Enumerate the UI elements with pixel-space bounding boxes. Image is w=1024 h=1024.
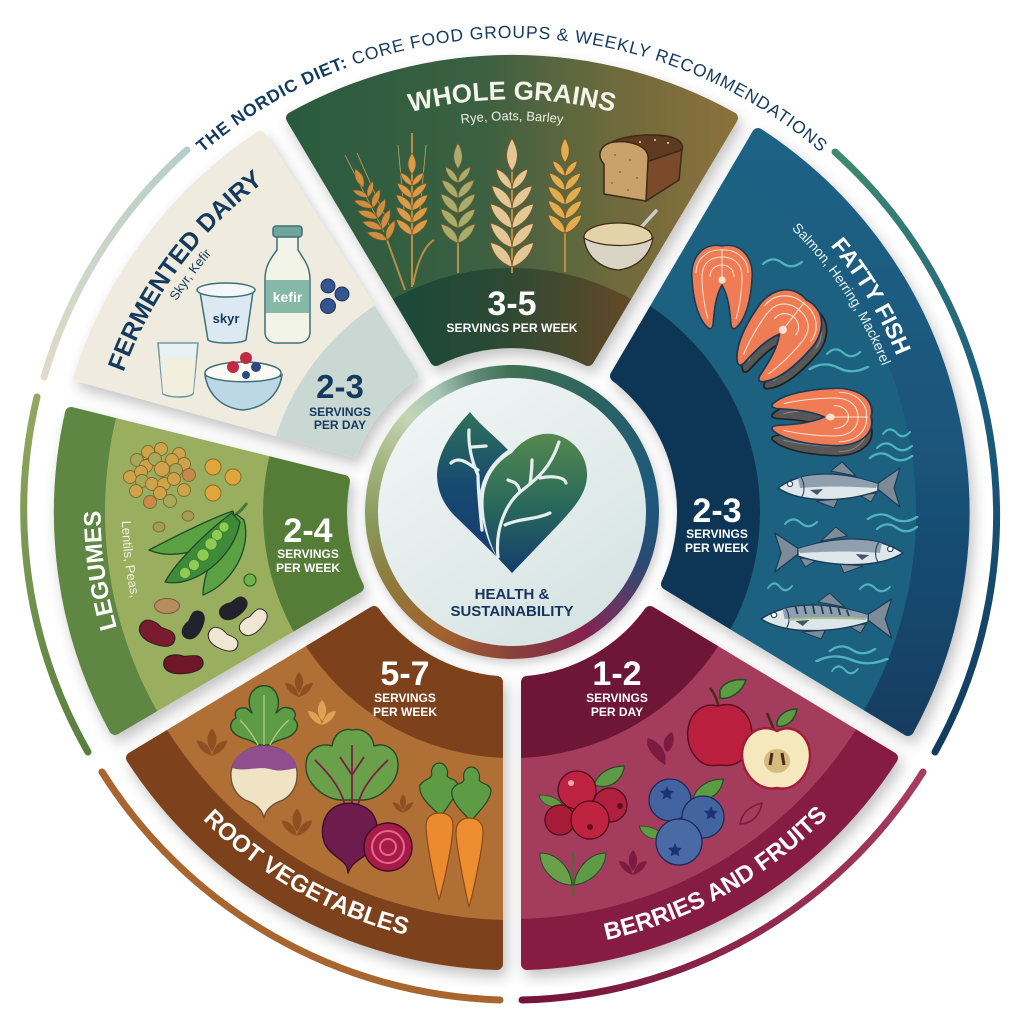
servings: root vegetables xyxy=(373,655,437,719)
outer arc: berries xyxy=(522,772,923,1000)
servings: dairy: PER DAY xyxy=(314,418,366,432)
servings: berries: 1-2 xyxy=(592,655,642,693)
servings: dairy: 2-3 xyxy=(316,368,364,405)
servings: berries: PER DAY xyxy=(591,705,643,719)
servings: legumes: 2-4 xyxy=(283,512,333,550)
icon: skyr cup xyxy=(197,283,255,343)
icon: turnip xyxy=(231,686,297,818)
icon: whole fish xyxy=(761,462,903,639)
icon: beans xyxy=(136,592,271,676)
whole grains background xyxy=(285,54,747,378)
outer arc: legumes xyxy=(24,397,88,752)
outer arc: fermented dairy xyxy=(44,150,187,377)
hub ring xyxy=(365,365,659,659)
panel: fermented dairy xyxy=(72,131,427,470)
panel: fatty fish xyxy=(609,128,981,748)
icon: kefir bottle xyxy=(265,226,310,343)
servings: fatty fish: SERVINGS xyxy=(686,527,748,541)
icon: waves xyxy=(763,259,917,673)
servings: dairy xyxy=(309,368,371,432)
icon: grain stalks xyxy=(342,133,582,290)
panel: legumes xyxy=(50,407,373,747)
icon: blueberries xyxy=(320,279,349,314)
hub label: SUSTAINABILITY xyxy=(450,603,574,620)
outer arc: fatty fish xyxy=(835,152,997,752)
icon: lentils xyxy=(124,442,241,532)
servings: fatty fish: PER WEEK xyxy=(685,541,749,555)
panel: berries and fruits xyxy=(518,606,907,984)
icon: leaf sprig xyxy=(540,852,606,897)
servings: whole grains: 3-5 xyxy=(487,285,537,323)
icon: decorative leaves xyxy=(619,732,762,875)
heading: whole grains: WHOLE GRAINS xyxy=(406,82,616,111)
servings: whole grains xyxy=(446,285,578,335)
icon: kefir bottle: kefir xyxy=(273,289,303,305)
dairy background xyxy=(72,131,427,470)
icon: pea pods xyxy=(149,503,256,595)
berries background xyxy=(518,606,907,984)
heading: fatty fish: FATTY FISH xyxy=(831,236,911,355)
servings: root vegetables: 5-7 xyxy=(380,655,430,693)
icon: yogurt bowl xyxy=(205,352,282,410)
servings: berries: SERVINGS xyxy=(586,691,648,705)
icon: carrots xyxy=(420,763,491,907)
servings: root vegetables: PER WEEK xyxy=(373,705,437,719)
icon: apples xyxy=(688,680,810,789)
hub disc xyxy=(378,378,646,646)
subheading: grains: Rye, Oats, Barley xyxy=(461,112,564,126)
heading: legumes: LEGUMES xyxy=(84,512,117,631)
central hub xyxy=(378,378,646,646)
icon: porridge bowl xyxy=(584,211,656,270)
legumes background xyxy=(50,407,373,747)
servings: fatty fish: 2-3 xyxy=(692,492,742,530)
servings: fatty fish xyxy=(685,492,749,555)
hub label: HEALTH & xyxy=(475,586,550,603)
icon: blueberries xyxy=(639,779,724,865)
servings: whole grains: SERVINGS PER WEEK xyxy=(446,321,578,335)
servings: root vegetables: SERVINGS xyxy=(374,691,436,705)
icon: bread loaf xyxy=(600,135,683,201)
icon: salmon steaks xyxy=(692,245,872,456)
icon: skyr cup: skyr xyxy=(213,311,239,326)
servings: dairy: SERVINGS xyxy=(309,405,371,419)
title: THE NORDIC DIET: CORE FOOD GROUPS & WEEKLY RECOMMENDATIONS xyxy=(195,26,826,150)
subheading: dairy: Skyr, Kefir xyxy=(170,249,210,300)
panel: root vegetables xyxy=(125,606,514,984)
outer arc: root vegetables xyxy=(102,772,500,1000)
heading: root vegetables: ROOT VEGETABLES xyxy=(204,808,408,934)
panel: whole grains xyxy=(285,54,747,378)
icon: beetroot xyxy=(306,730,412,873)
hub label xyxy=(450,586,574,620)
heading: berries and fruits: BERRIES AND FRUITS xyxy=(604,806,826,940)
servings: legumes: SERVINGS xyxy=(277,547,339,561)
root vegetables background xyxy=(125,606,514,984)
subheading: fish: Salmon, Herring, Mackerel xyxy=(793,224,892,366)
icon: leaf heart xyxy=(437,412,587,573)
servings: legumes xyxy=(276,512,340,575)
subheading: legumes: Lentils, Peas, xyxy=(122,522,137,598)
icon: decorative sprigs xyxy=(197,672,414,836)
servings: berries xyxy=(586,655,648,719)
fatty fish background xyxy=(609,128,981,748)
heading: fermented dairy: FERMENTED DAIRY xyxy=(108,169,259,371)
icon: cranberries xyxy=(539,766,627,839)
icon: glass of milk xyxy=(158,343,198,397)
servings: legumes: PER WEEK xyxy=(276,561,340,575)
